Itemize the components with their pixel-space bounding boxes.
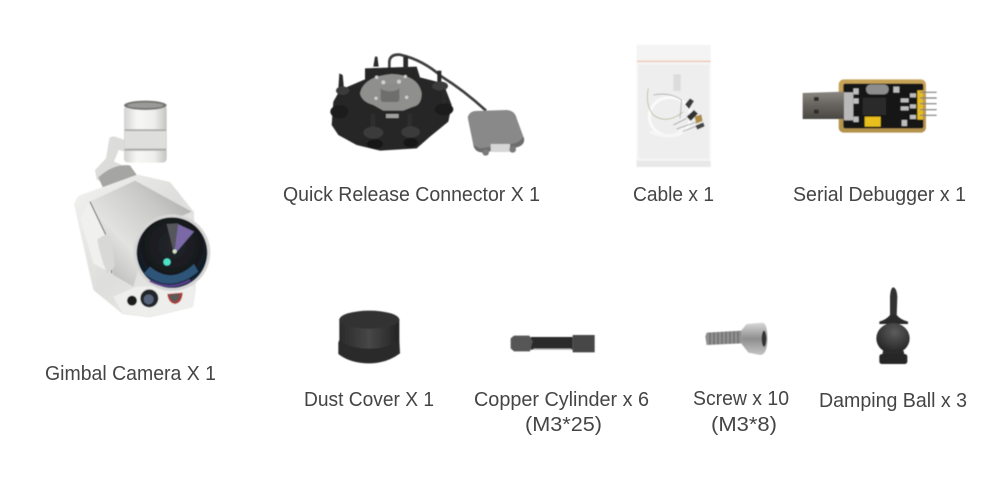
label: copper cylinder: Copper Cylinder x 6 [474, 389, 649, 411]
icon: gimbal camera [74, 101, 210, 317]
icon: dust cover [338, 311, 400, 363]
label: copper cylinder [474, 389, 649, 436]
label: screw: (M3*8) [711, 414, 777, 436]
label: cable: Cable x 1 [633, 184, 714, 206]
label: quick release connector: Quick Release Connector X 1 [283, 184, 540, 206]
label: dust cover: Dust Cover X 1 [304, 389, 434, 411]
icon: quick release connector [330, 55, 524, 156]
label: screw: Screw x 10 [693, 388, 789, 410]
label: screw [693, 388, 789, 436]
label: serial debugger: Serial Debugger x 1 [793, 184, 966, 206]
label: copper cylinder: (M3*25) [525, 414, 602, 436]
label: damping ball: Damping Ball x 3 [819, 390, 967, 412]
icon: damping ball [876, 287, 910, 364]
icon: screw [705, 323, 767, 355]
label: gimbal camera: Gimbal Camera X 1 [45, 363, 216, 385]
icon: serial debugger [803, 79, 937, 133]
icon: cable in bag [637, 45, 711, 167]
icon: copper cylinder [511, 335, 595, 352]
